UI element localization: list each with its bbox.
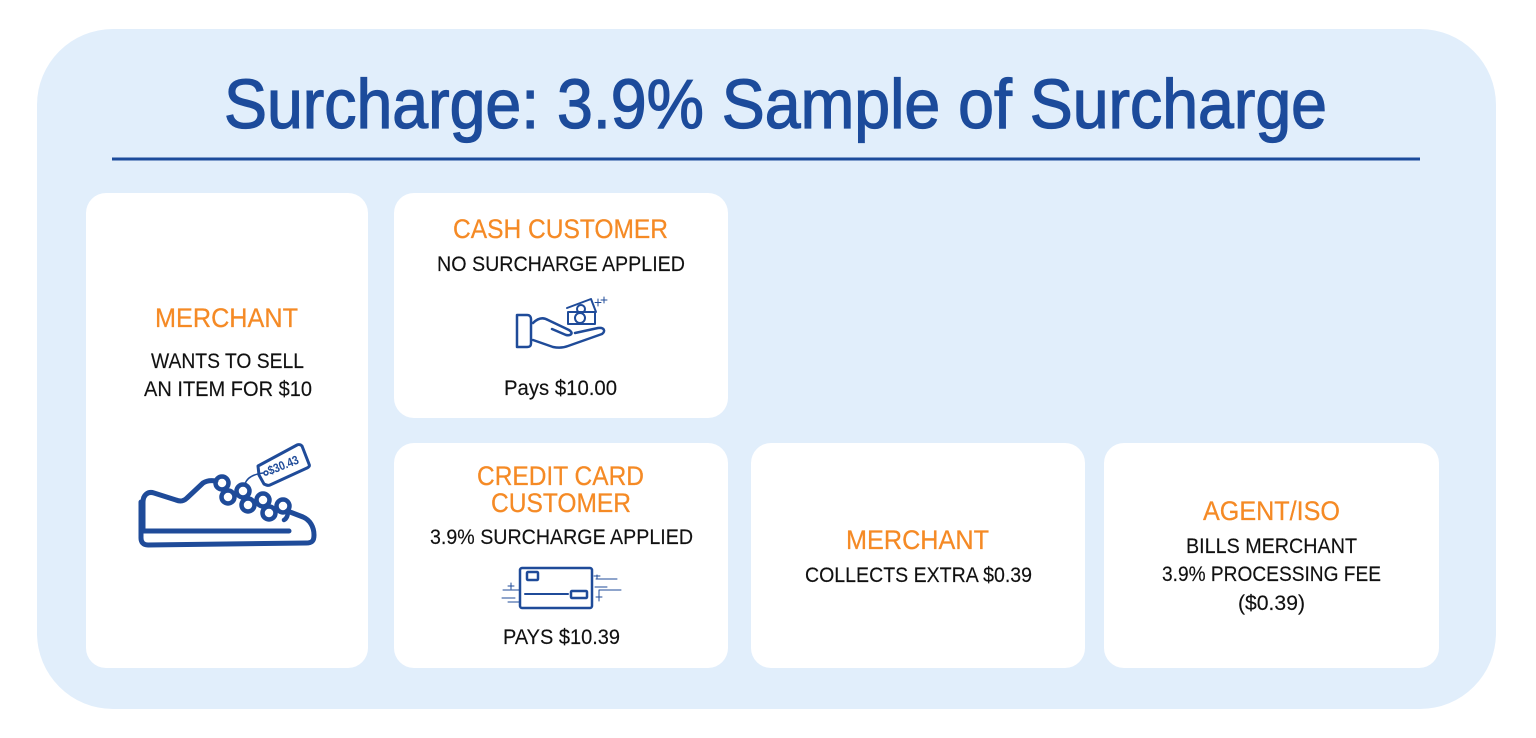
heading: cash customer: CASH CUSTOMER xyxy=(453,214,668,244)
heading: credit card customer xyxy=(477,461,644,518)
panel: merchant collects xyxy=(751,443,1085,668)
text: wants to sell an item: WANTS TO SELL xyxy=(151,349,304,373)
text: bills merchant: 3.9% PROCESSING FEE xyxy=(1162,562,1381,586)
heading: credit card customer: CUSTOMER xyxy=(491,488,631,518)
laces xyxy=(216,476,290,520)
panel: merchant wants to sell xyxy=(86,193,368,668)
panel: credit card customer xyxy=(394,443,728,668)
text: surcharge applied: 3.9% SURCHARGE APPLIED xyxy=(430,525,693,549)
text: bills merchant xyxy=(1162,534,1381,615)
icon: shoe with price tag: $30.43 xyxy=(266,453,301,478)
heading: merchant: MERCHANT xyxy=(846,525,989,555)
text: wants to sell an item xyxy=(144,349,312,401)
heading: merchant: MERCHANT xyxy=(155,303,298,333)
panel: cash customer xyxy=(394,193,728,418)
title: Surcharge: 3.9% Sample of Surcharge xyxy=(224,65,1327,143)
text: collects extra: COLLECTS EXTRA $0.39 xyxy=(805,563,1032,587)
heading: credit card customer: CREDIT CARD xyxy=(477,461,644,491)
icon: shoe with price tag xyxy=(141,445,314,545)
icon: hand holding cash xyxy=(517,297,607,348)
text: wants to sell an item: AN ITEM FOR $10 xyxy=(144,377,312,401)
text: no surcharge applied: NO SURCHARGE APPLIED xyxy=(437,252,685,276)
text: pays $10.39: PAYS $10.39 xyxy=(503,625,620,649)
heading: agent/iso: AGENT/ISO xyxy=(1203,496,1340,526)
text: bills merchant: BILLS MERCHANT xyxy=(1186,534,1357,558)
panel: agent/iso xyxy=(1104,443,1439,668)
text: pays $10.00: Pays $10.00 xyxy=(504,376,617,400)
text: bills merchant: ($0.39) xyxy=(1238,591,1305,615)
icon: credit card xyxy=(502,568,621,608)
